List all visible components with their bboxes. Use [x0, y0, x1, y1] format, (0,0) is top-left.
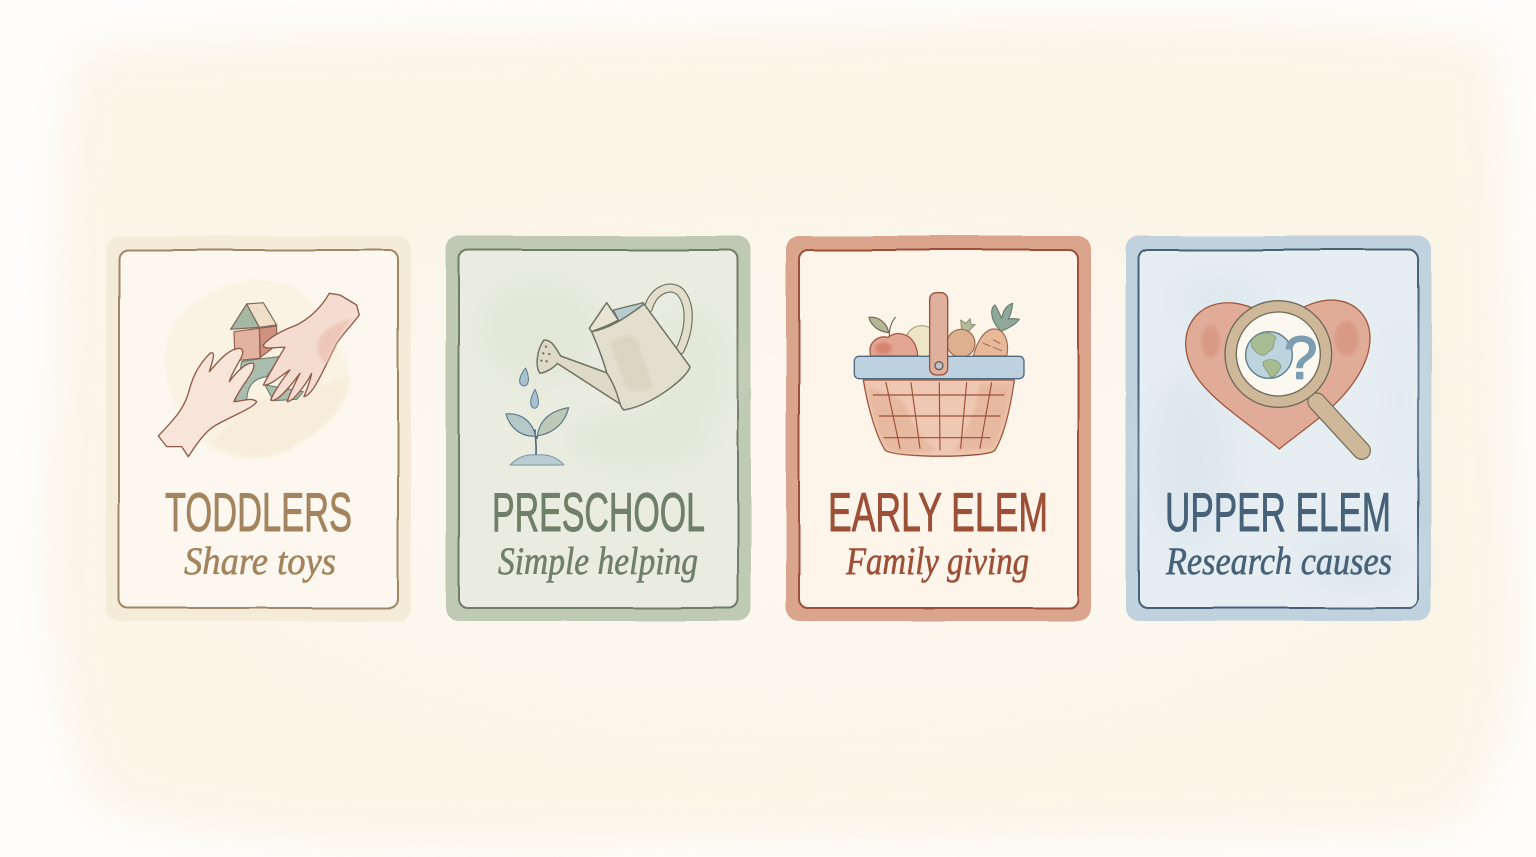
question mark: ?: [1284, 324, 1317, 391]
apple: [870, 334, 918, 356]
can opening: [613, 303, 647, 323]
magnifier handle: [1317, 402, 1362, 451]
heading: upper elem: UPPER ELEM: [1165, 481, 1391, 543]
icon: heart, magnifying glass and globe: [1186, 300, 1370, 451]
card: preschool: [446, 236, 751, 621]
toy blocks: [231, 303, 303, 402]
icon: basket of food: [854, 293, 1024, 456]
yellow fruit: [906, 326, 938, 358]
basket body: [863, 380, 1014, 456]
card frame: upper elem: [1126, 236, 1431, 621]
card: toddlers: [106, 236, 411, 621]
can handle: [648, 288, 688, 350]
can spout: [537, 340, 622, 405]
card frame: preschool: [446, 236, 751, 621]
leafy top: [961, 319, 975, 332]
globe: [1246, 332, 1292, 378]
paper wash: preschool: [480, 280, 730, 470]
caption: share toys: Share toys: [184, 540, 336, 583]
card: upper elem: [1126, 236, 1431, 621]
caption: simple helping: Simple helping: [498, 540, 698, 583]
can body: [592, 304, 690, 410]
heading: toddlers: TODDLERS: [165, 481, 352, 543]
paper wash: upper elem: [1145, 270, 1420, 595]
carrot: [973, 329, 1008, 356]
caption: family giving: Family giving: [845, 540, 1029, 583]
card frame: toddlers: [106, 236, 411, 621]
icon: watering can and sprout: [506, 288, 690, 465]
heart: [1186, 300, 1370, 449]
basket handle: [930, 293, 948, 375]
heading: early elem: EARLY ELEM: [828, 481, 1048, 543]
water drops: [520, 368, 528, 386]
sprout: [510, 455, 564, 465]
card frame: early elem: [786, 236, 1091, 621]
basket weave: [873, 383, 1004, 450]
icon: hands sharing toy blocks: [158, 280, 359, 459]
basket rim: [854, 356, 1024, 379]
right hand: [263, 293, 359, 402]
caption: research causes: Research causes: [1165, 540, 1392, 583]
heading: preschool: PRESCHOOL: [492, 481, 705, 543]
left hand: [158, 348, 257, 457]
magnifier ring: [1231, 306, 1326, 402]
card: early elem: [786, 236, 1091, 621]
carrot greens: [992, 303, 1019, 332]
orange fruit: [947, 329, 975, 357]
